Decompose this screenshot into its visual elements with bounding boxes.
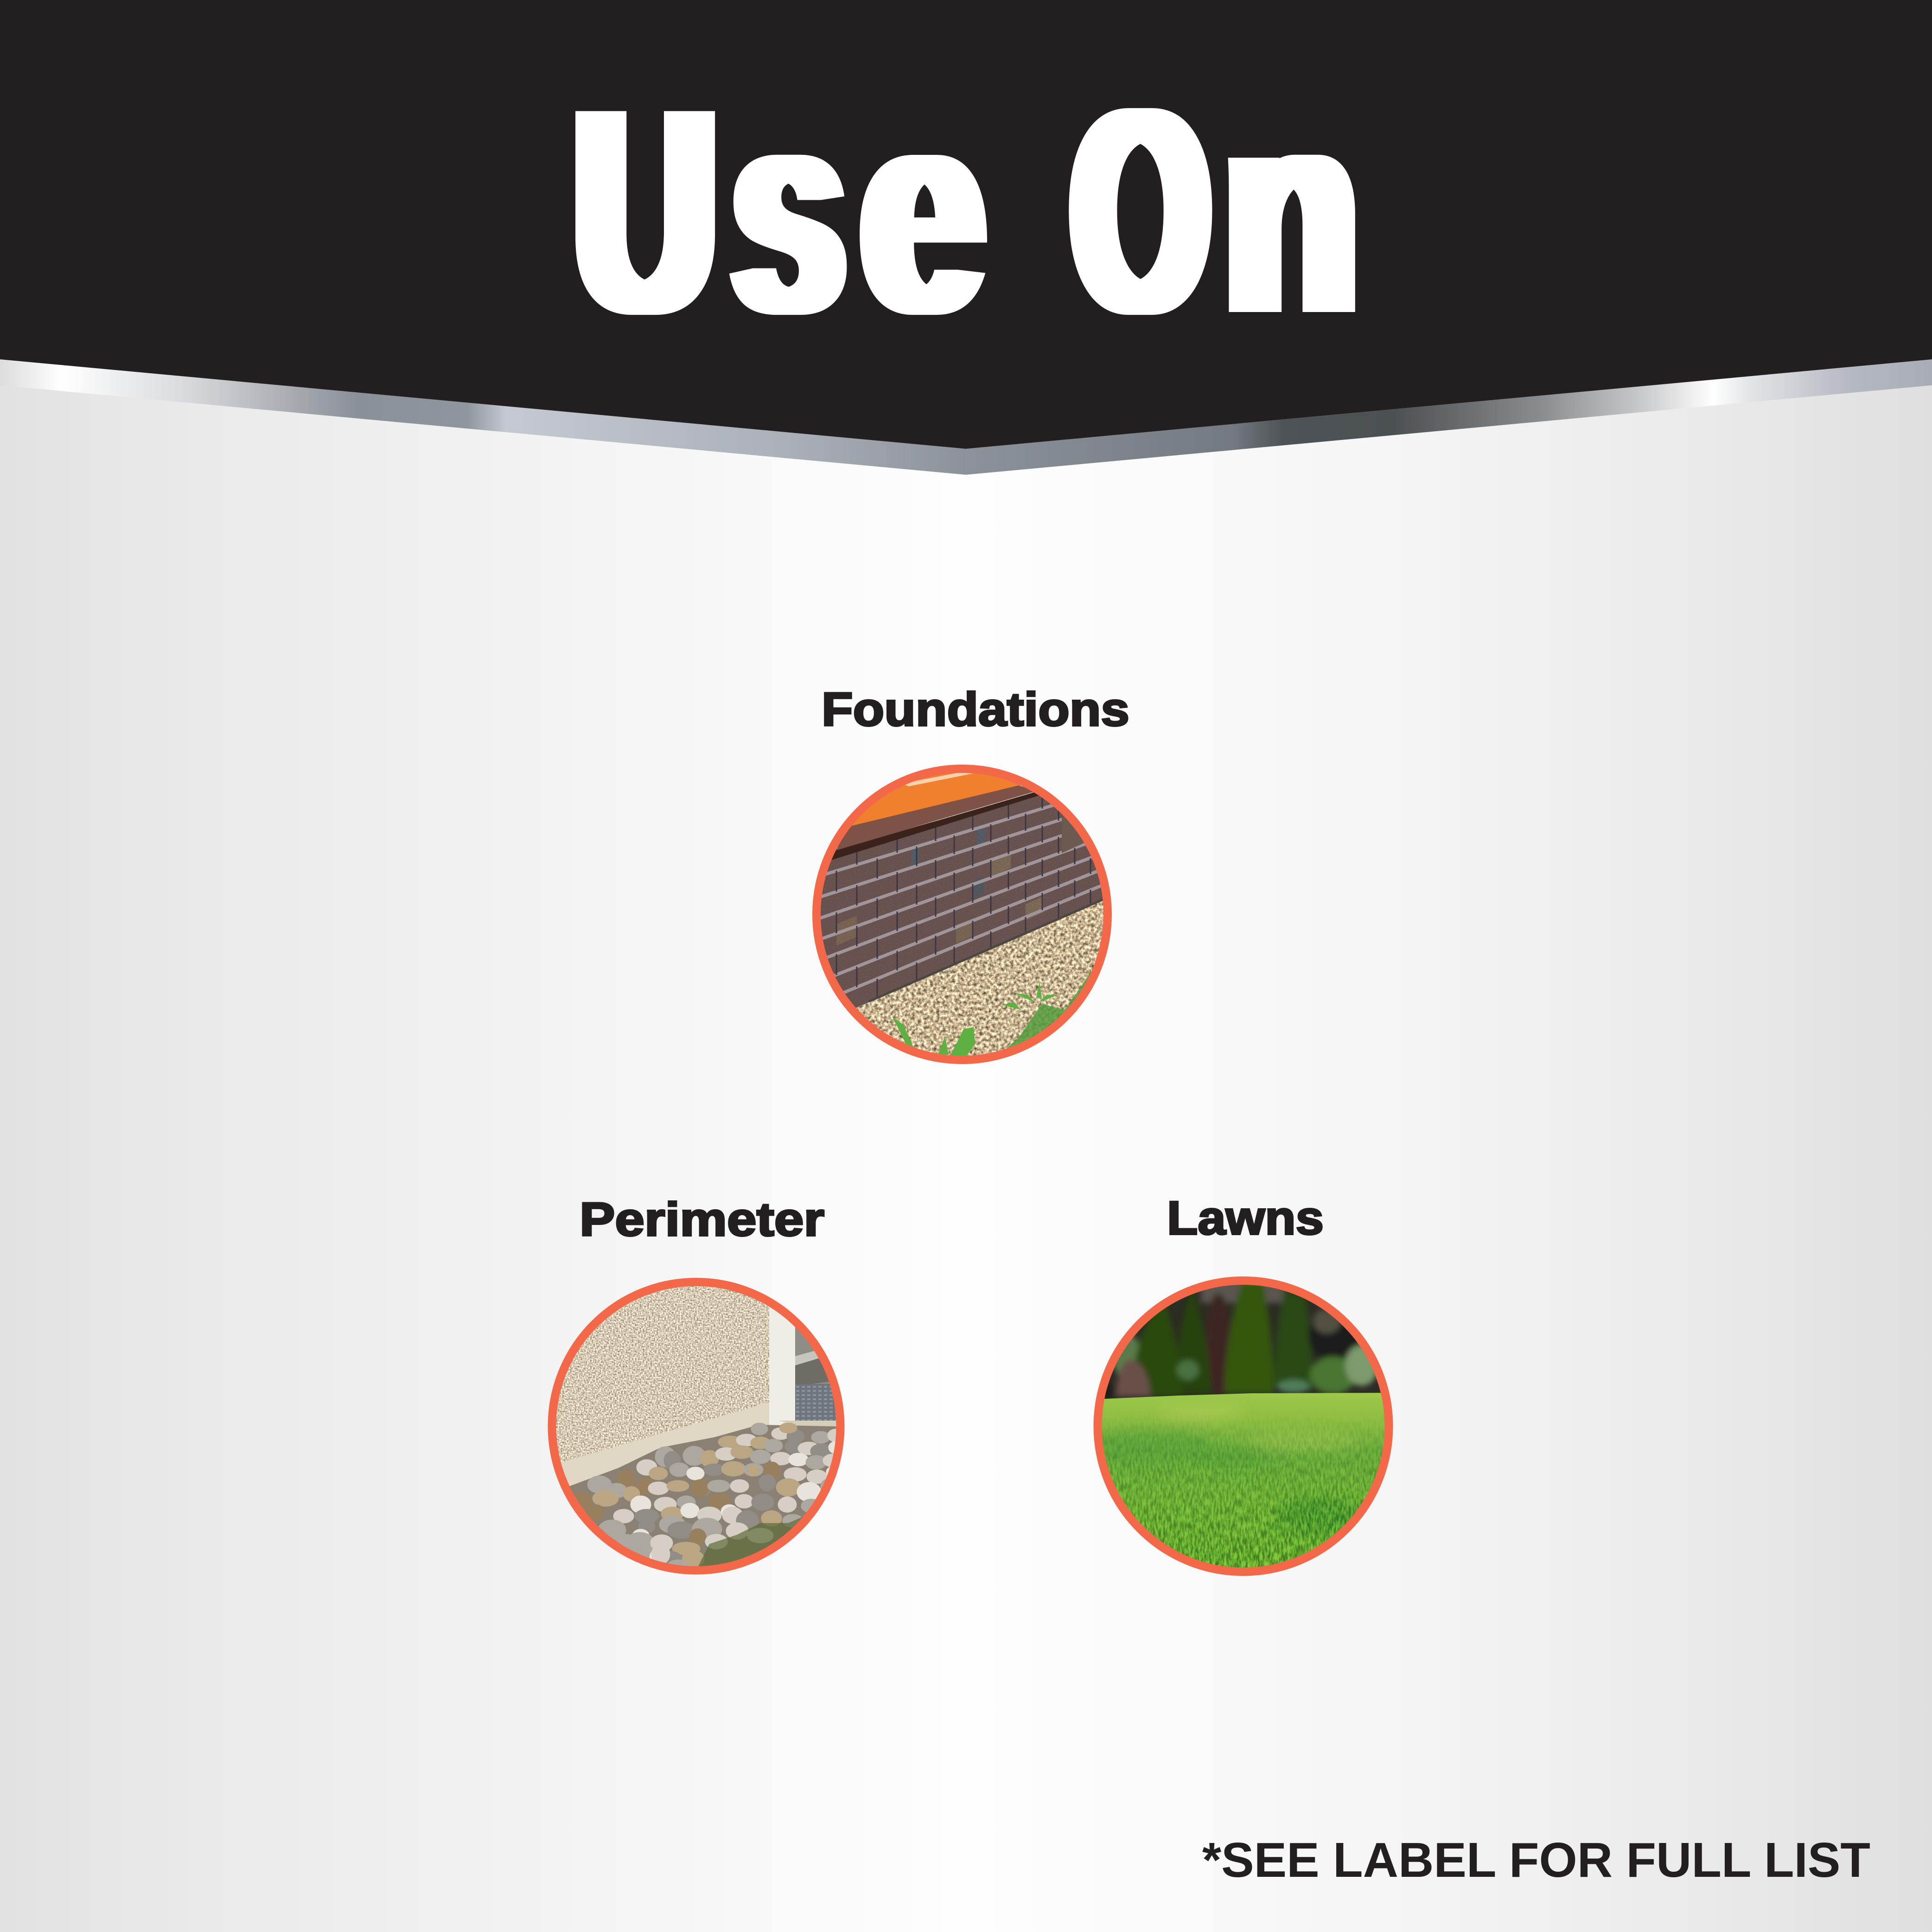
footnote: *SEE LABEL FOR FULL LIST [1202,1833,1870,1887]
river rocks [574,1425,843,1571]
orange timber [839,760,1048,830]
heading: Perimeter: Perimeter [580,1193,824,1246]
bricks base [821,796,1103,1008]
brick speckle [821,785,1103,1008]
gray background [795,1298,846,1385]
blurred trees and shrubs [1094,1275,1378,1398]
title [510,65,1437,389]
tinted bricks [836,916,857,946]
mortar lines [821,804,1101,994]
metal grate [795,1384,846,1422]
white pillar [769,1298,795,1433]
header silver chevron band [0,359,1932,475]
ledge [835,785,1037,849]
title: U [575,48,715,374]
title: e [863,48,983,374]
grass [1094,1393,1396,1581]
grass patch [695,1516,807,1576]
orange ring [816,769,1108,1060]
orange ring [1098,1281,1389,1572]
green plants [892,969,1094,1062]
heading: Foundations: Foundations [822,683,1129,736]
heading: Lawns: Lawns [1167,1192,1324,1244]
photo: green lawn with trees [1085,1275,1396,1581]
gravel base [556,1425,846,1576]
photo: stucco wall with river rock [547,1275,846,1576]
orange ring [552,1282,840,1570]
title: n [1225,48,1357,374]
vertical brick joints [835,797,1091,997]
title: O [1073,48,1208,374]
photo: brick foundation wall with gravel [807,760,1117,1071]
concrete sill [779,1421,846,1434]
header black panel [0,0,1932,449]
gravel [807,895,1117,1071]
vent [1062,804,1087,853]
stucco wall [547,1275,779,1498]
title: s [734,48,843,374]
